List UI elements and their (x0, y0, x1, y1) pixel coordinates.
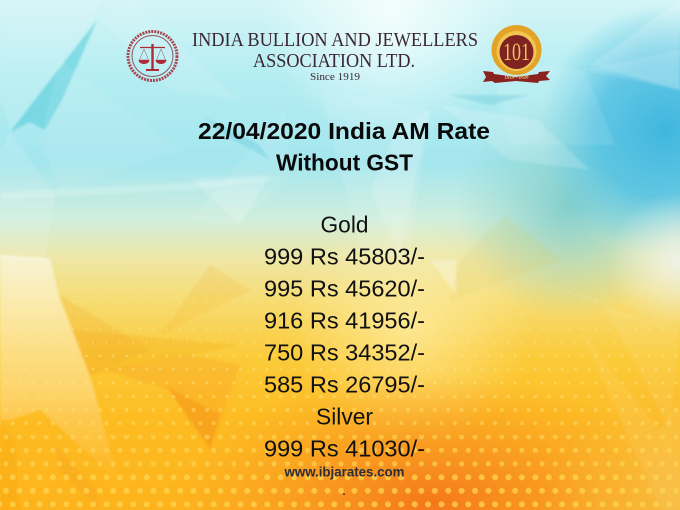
heading: association name: Since 1919 (310, 72, 360, 83)
website link: www.ibjarates.com (284, 464, 404, 480)
gold rates: 750 Rs 34352/- (264, 340, 425, 366)
footer dot: . (342, 486, 346, 498)
icon: association scales emblem (128, 32, 177, 80)
title: 22/04/2020 India AM Rate (198, 118, 490, 144)
heading: association name: ASSOCIATION LTD. (253, 50, 415, 72)
silver rates (264, 404, 425, 462)
icon: 101 years gold badge: 101 (503, 39, 530, 66)
silver rates: 999 Rs 41030/- (264, 436, 425, 462)
heading: association name (192, 29, 478, 83)
gold rates: 999 Rs 45803/- (264, 244, 425, 270)
gold rates: 585 Rs 26795/- (264, 372, 425, 398)
gold rates: 916 Rs 41956/- (264, 308, 425, 334)
title (198, 118, 490, 176)
gold rates (264, 212, 425, 398)
heading: association name: INDIA BULLION AND JEWELLERS (192, 29, 478, 51)
silver rates: Silver (316, 404, 373, 430)
gold rates: Gold (320, 212, 368, 238)
gold rates: 995 Rs 45620/- (264, 276, 425, 302)
icon: 101 years gold badge: 1919 - 2020 (504, 74, 529, 80)
title: Without GST (276, 150, 414, 176)
icon: 101 years gold badge (483, 25, 550, 83)
